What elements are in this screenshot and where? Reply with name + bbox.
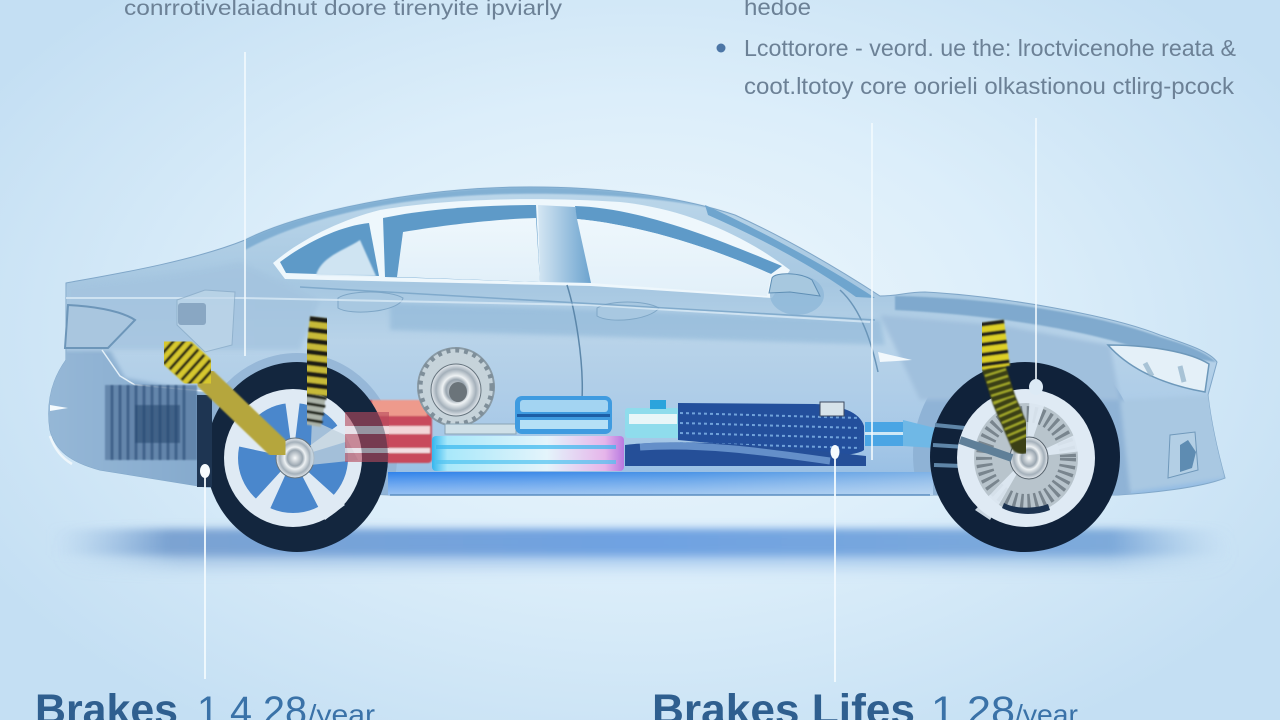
- door seam: [567, 285, 582, 400]
- top cylinder: [515, 396, 612, 434]
- gear disc: [418, 348, 494, 426]
- rear bumper crease: [102, 350, 215, 392]
- rear engine module: [105, 385, 197, 460]
- bullet: [716, 44, 726, 52]
- body shading: [40, 262, 1225, 571]
- fog lamp: [1168, 432, 1198, 478]
- rear spring sleeve: [205, 378, 278, 448]
- rear brake ghost: [310, 420, 358, 465]
- text: top right block: Lcottorore - veord. ue the: lroctvicenohe reata &: [744, 35, 1236, 61]
- b pillar: [538, 205, 592, 283]
- body crease: [300, 287, 875, 320]
- front window frame: [575, 206, 782, 274]
- door handle front: [597, 302, 659, 320]
- roof band: [245, 187, 735, 250]
- red module overlay on tyre: [345, 412, 389, 462]
- stat: brakes left: [35, 686, 375, 720]
- front door seam: [840, 290, 878, 372]
- headlight: [1108, 345, 1209, 392]
- driveshaft: [960, 440, 1012, 458]
- rear hub: [276, 438, 314, 478]
- sill line: [390, 494, 930, 496]
- rear tyre: [206, 362, 388, 552]
- rear spring coil left: [168, 345, 207, 380]
- lower rear edge: [50, 436, 72, 464]
- callout lines: [200, 52, 1043, 682]
- quarter window: [280, 223, 379, 276]
- light bar battery: [432, 436, 624, 471]
- door handle rear: [338, 292, 403, 312]
- rear door glass: [397, 218, 540, 282]
- rear door window: [383, 205, 540, 282]
- cyan module: [625, 400, 680, 438]
- front rim: [957, 389, 1095, 527]
- ground shadow: [50, 529, 1230, 564]
- rear spring coil right: [309, 318, 325, 425]
- front hub: [1010, 437, 1048, 479]
- front rim spokes: [975, 392, 1090, 520]
- front wheel: [930, 362, 1120, 552]
- rear wheel: [206, 362, 389, 552]
- rear reflector: [50, 405, 68, 411]
- front brake disc: [974, 403, 1078, 513]
- stat: brakes life right: [652, 686, 1078, 720]
- trunk bracket: [178, 303, 206, 325]
- tail light: [65, 305, 135, 348]
- quarter window interior: [316, 240, 376, 276]
- belt line: [66, 298, 870, 322]
- brake disc texture: [984, 414, 1068, 502]
- front spring: [986, 322, 1022, 442]
- side mirror: [769, 274, 824, 315]
- rear rim inner: [238, 403, 348, 513]
- tyre tread highlights: [933, 425, 965, 466]
- battery terminal: [820, 402, 844, 416]
- rim dark segments: [1002, 503, 1050, 514]
- fog lamp insert: [1180, 440, 1196, 472]
- upper blue battery cylinder: [678, 403, 864, 455]
- front tyre: [930, 362, 1120, 552]
- fender vent: [878, 352, 912, 362]
- text: top right block: [716, 0, 1236, 99]
- dark rear axle stop: [197, 395, 212, 487]
- car: [40, 187, 1225, 571]
- lower blue battery cylinder: [625, 442, 866, 466]
- trunk hinge ghost: [177, 290, 235, 352]
- headlight detail: [1145, 363, 1184, 382]
- red module: [345, 400, 432, 463]
- window surround: [273, 199, 790, 298]
- car body shell: [49, 187, 1225, 495]
- front link pipes: [865, 420, 935, 448]
- front door glass: [577, 219, 771, 296]
- text: top right block: coot.ltotoy core oorieli olkastionou ctlirg-pcock: [744, 73, 1235, 99]
- rear spokes: [232, 400, 352, 520]
- windshield strip: [705, 205, 875, 298]
- rear rim: [224, 389, 362, 527]
- link pipe: [445, 424, 516, 434]
